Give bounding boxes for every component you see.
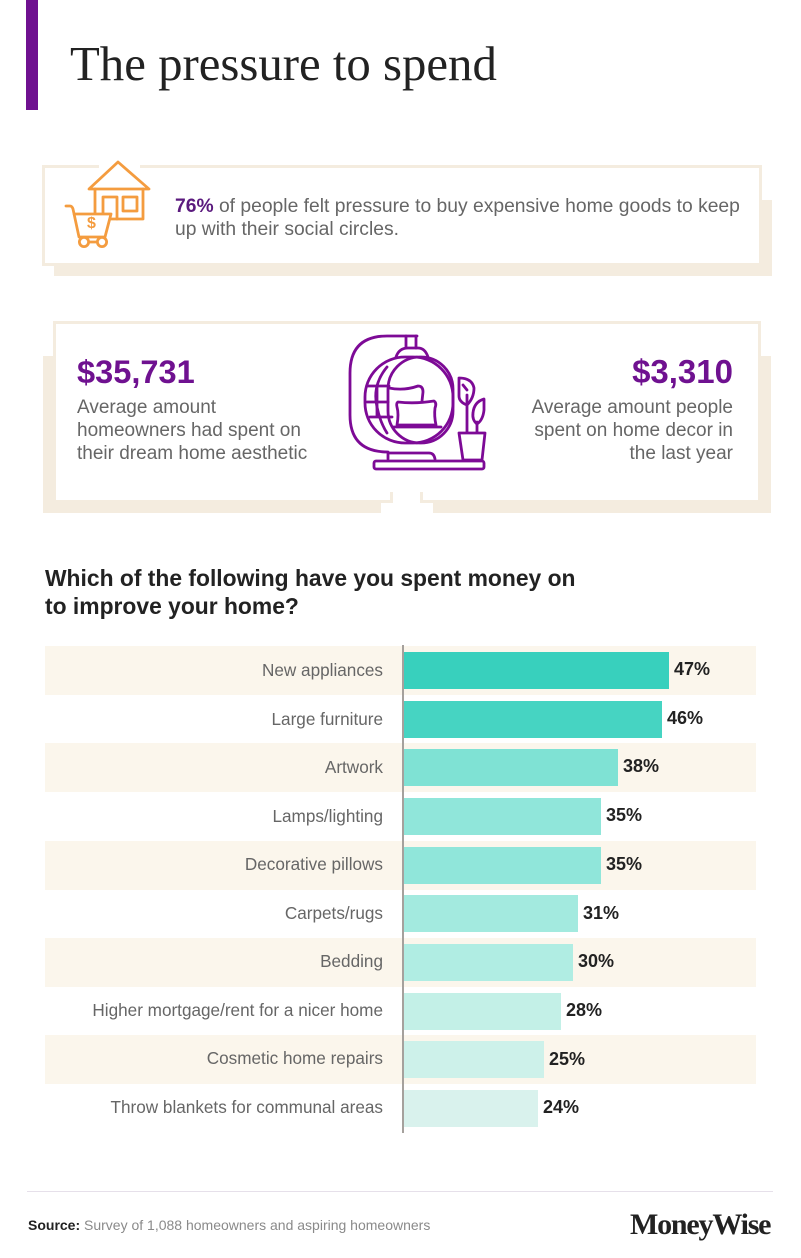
frame gap bbox=[393, 492, 420, 513]
icon: dollar sign: $ bbox=[87, 215, 96, 232]
row: Throw blankets bbox=[110, 1090, 579, 1127]
row: Large furniture: 46% bbox=[667, 708, 703, 728]
description: the last year bbox=[630, 443, 733, 464]
row: Lamps/lighting: Lamps/lighting bbox=[272, 806, 383, 826]
chart axis bbox=[402, 645, 404, 1133]
chart heading: to improve your home? bbox=[45, 593, 299, 619]
row: Throw blankets: 24% bbox=[543, 1097, 579, 1117]
amount: $35,731 bbox=[77, 353, 195, 390]
row: Large furniture: Large furniture bbox=[272, 709, 383, 729]
frame stub left bbox=[390, 492, 393, 503]
description: Average amount bbox=[77, 397, 216, 418]
frame stub right bbox=[420, 492, 423, 503]
description bbox=[77, 397, 307, 464]
callout text bbox=[175, 196, 740, 240]
description: spent on home decor in bbox=[534, 420, 733, 441]
icon: house and shopping cart bbox=[64, 160, 150, 248]
chart heading bbox=[45, 565, 576, 619]
title: The pressure to spend bbox=[70, 37, 497, 91]
row: Artwork: Artwork bbox=[325, 757, 383, 777]
stat: homeowners bbox=[77, 353, 307, 464]
row: Carpets/rugs: 31% bbox=[583, 903, 619, 923]
row: Decorative pillows: 35% bbox=[606, 854, 642, 874]
row: Artwork: 38% bbox=[623, 756, 659, 776]
card frame bbox=[42, 165, 762, 266]
row: Cosmetic home repairs: Cosmetic home repairs bbox=[207, 1048, 383, 1068]
description: their dream home aesthetic bbox=[77, 443, 307, 464]
description bbox=[532, 397, 733, 464]
icon: hanging chair and plant bbox=[348, 334, 486, 470]
row: New appliances: New appliances bbox=[262, 660, 383, 680]
row: Carpets/rugs bbox=[285, 895, 619, 932]
row: Cosmetic home repairs: 25% bbox=[549, 1049, 585, 1069]
row: Throw blankets: Throw blankets for communal areas bbox=[111, 1097, 383, 1117]
row: Artwork bbox=[45, 743, 756, 792]
panel: spending stats bbox=[43, 321, 771, 513]
description: homeowners had spent on bbox=[77, 420, 301, 441]
row: Decorative pillows: Decorative pillows bbox=[245, 854, 383, 874]
source note: Source: Survey of 1,088 homeowners and aspiring homeowners bbox=[28, 1217, 430, 1233]
row: Large furniture bbox=[272, 701, 703, 738]
MoneyWise logo: MoneyWise bbox=[630, 1208, 770, 1241]
row: Lamps/lighting bbox=[272, 798, 642, 835]
card shadow right bbox=[433, 356, 771, 513]
description: Average amount people bbox=[532, 397, 733, 418]
callout text: 76% of people felt pressure to buy expensive home goods to keep bbox=[175, 196, 740, 217]
amount: $3,310 bbox=[632, 353, 733, 390]
row: Bedding: 30% bbox=[578, 951, 614, 971]
row: Higher mortgage/rent: Higher mortgage/rent for a nicer home bbox=[92, 1000, 383, 1020]
bar chart bbox=[45, 645, 756, 1133]
card shadow bbox=[54, 200, 772, 276]
card shadow bbox=[43, 356, 381, 513]
panel: social pressure callout bbox=[42, 160, 772, 276]
row: Higher mortgage/rent: 28% bbox=[566, 1000, 602, 1020]
row: Bedding: Bedding bbox=[320, 951, 383, 971]
chart heading: Which of the following have you spent money on bbox=[45, 565, 576, 591]
stat: home decor bbox=[532, 353, 733, 464]
title accent bar bbox=[26, 0, 38, 110]
row: Bedding bbox=[45, 938, 756, 987]
row: New appliances: 47% bbox=[674, 659, 710, 679]
row: New appliances bbox=[45, 646, 756, 695]
row: Lamps/lighting: 35% bbox=[606, 805, 642, 825]
row: Cosmetic home repairs bbox=[45, 1035, 756, 1084]
row: Higher mortgage/rent bbox=[92, 993, 602, 1030]
row: Decorative pillows bbox=[45, 841, 756, 890]
callout text: up with their social circles. bbox=[175, 219, 399, 240]
row: Carpets/rugs: Carpets/rugs bbox=[285, 903, 383, 923]
card frame bbox=[53, 321, 761, 503]
